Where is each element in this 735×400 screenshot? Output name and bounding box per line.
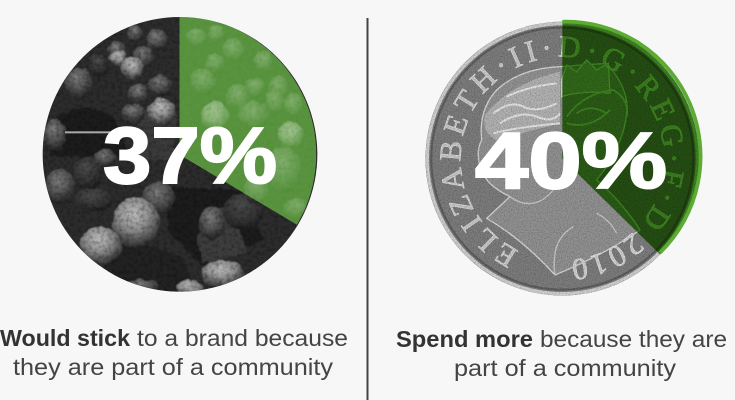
coin date: 2010: [573, 232, 644, 280]
panel: coin pie chart 40%: [425, 20, 702, 296]
value: 40%: 40%: [475, 116, 667, 205]
divider: [366, 18, 368, 400]
coin portrait: [478, 60, 640, 275]
coin inscription: ELIZABETH·II·D·G·REG·F·D: [440, 36, 684, 268]
caption: spend more: part of a community: [454, 355, 677, 381]
value: 37%: 37%: [103, 111, 277, 200]
panel: crowd pie chart 37%: [40, 13, 320, 297]
caption: would stick to a brand: they are part of a community: [13, 354, 334, 380]
caption: spend more: Spend more: [396, 326, 533, 352]
coin circle: [425, 22, 699, 296]
green pie wedge 37%: [180, 17, 316, 224]
caption: would stick to a brand: to a brand because: [137, 325, 348, 351]
caption: would stick to a brand: [0, 325, 348, 380]
caption: spend more: because they are: [540, 326, 727, 352]
caption: spend more: [396, 326, 727, 381]
crowd photo circle: [40, 13, 320, 297]
caption: would stick to a brand: Would stick: [0, 325, 130, 351]
green pie wedge 40%: [562, 22, 701, 254]
